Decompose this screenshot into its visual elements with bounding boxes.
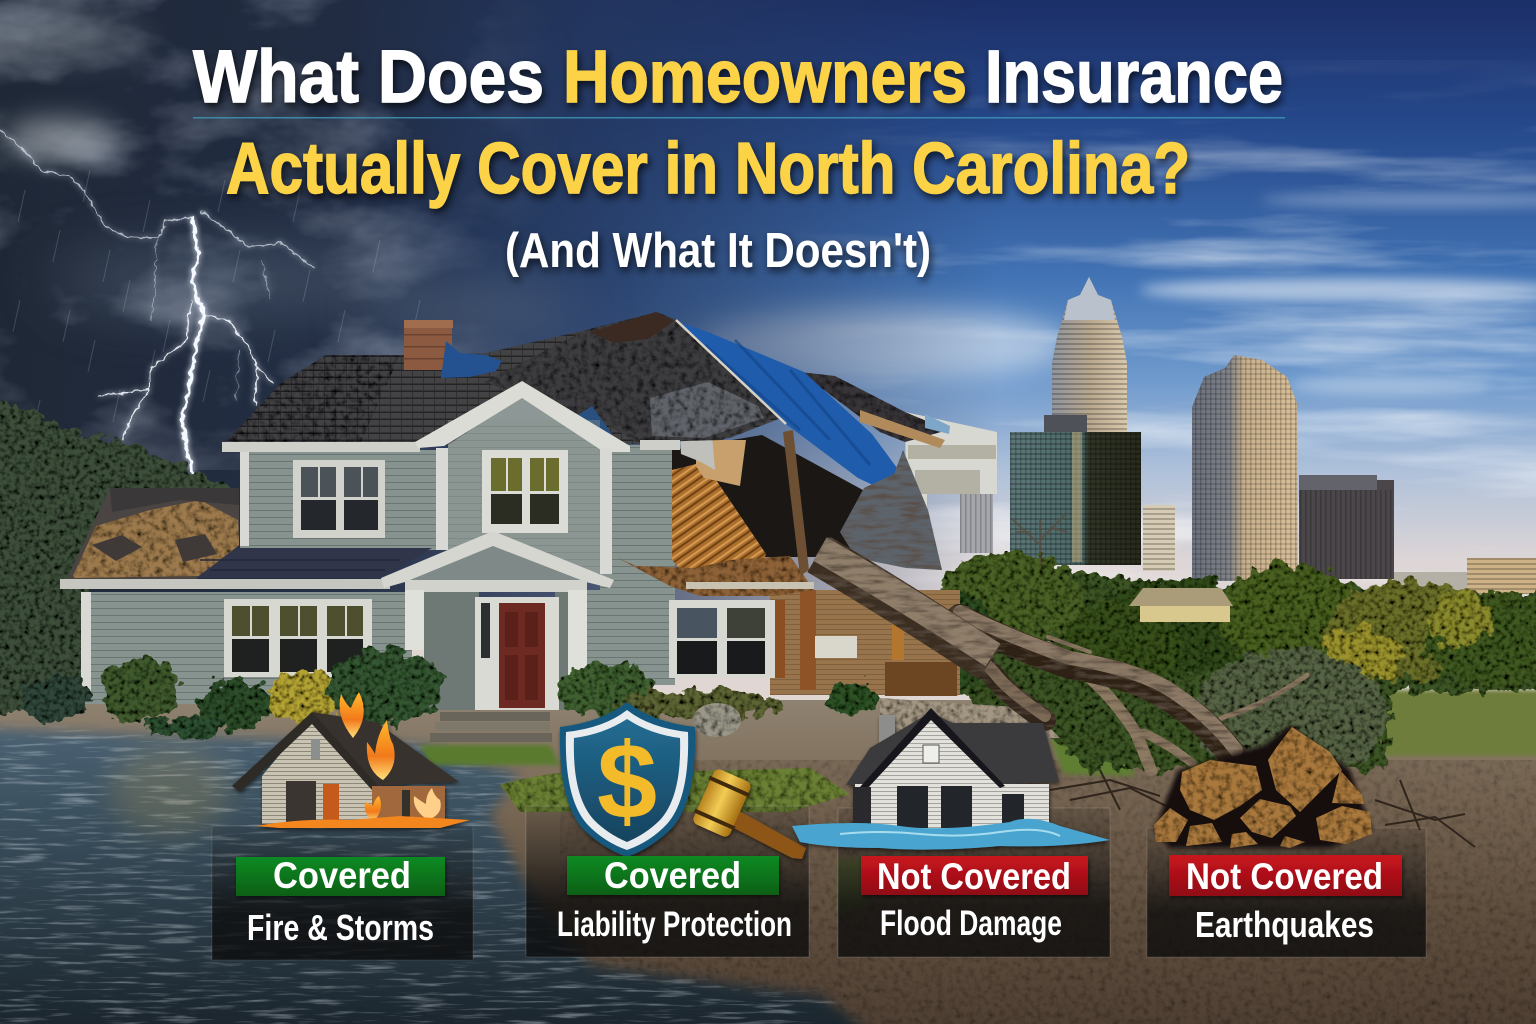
background: stormy sky to clear sky <box>0 0 1536 700</box>
flame strip on water <box>256 816 470 828</box>
house: right rear wing <box>800 372 997 554</box>
badge: not covered: Not Covered <box>877 856 1071 897</box>
flood water <box>792 819 1110 850</box>
tree: lower limb <box>960 647 1045 720</box>
dark trees on left <box>0 402 240 725</box>
house: damaged main roof <box>222 312 781 452</box>
striped tower <box>1192 355 1298 581</box>
icon: burning house <box>232 692 470 828</box>
damaged two-storey house <box>60 312 997 742</box>
torn metal sheet <box>840 450 942 570</box>
background trees on right <box>922 552 1536 780</box>
yellow neighbour house <box>1129 588 1233 622</box>
title line one <box>193 35 1283 118</box>
panel: earthquakes <box>1147 725 1426 957</box>
porch gable <box>381 531 614 680</box>
house: storm hole <box>672 435 872 557</box>
garden rock <box>693 703 741 737</box>
storm debris twigs <box>1050 770 1475 847</box>
garden shrubs <box>20 650 876 737</box>
rain streaks <box>13 170 420 432</box>
label: liability protection: Liability Protection <box>557 905 792 944</box>
ground: dirt and water <box>0 690 1536 1024</box>
panel: flood damage <box>792 708 1110 957</box>
dark tower <box>1299 475 1394 579</box>
small blue tarp near chimney <box>441 341 502 378</box>
badge: not covered: Not Covered <box>1186 856 1383 897</box>
house: central gable <box>415 381 630 574</box>
gravel path <box>880 698 1060 742</box>
title line one: Homeowners <box>563 35 967 118</box>
panel: liability protection <box>526 702 809 957</box>
title <box>193 35 1283 278</box>
tree: thin branches <box>1048 637 1307 770</box>
front steps <box>430 712 552 742</box>
house: lower right room <box>770 590 960 696</box>
window: upper left <box>293 460 385 538</box>
tree: main limb <box>960 618 1232 755</box>
label: flood damage: Flood Damage <box>880 904 1062 943</box>
house: upper left wall <box>240 450 440 550</box>
collapsed porch debris <box>618 556 814 596</box>
icon: cracked rocks <box>1154 725 1372 848</box>
badge: covered: Covered <box>273 855 411 896</box>
house: right walls <box>424 445 675 710</box>
badge: covered: Covered <box>604 855 741 896</box>
icon: flooded house <box>792 708 1110 850</box>
tree: trunk <box>818 554 990 662</box>
icon: shield with dollar sign <box>560 702 695 857</box>
window: lower left triple <box>224 599 372 677</box>
flames on roof <box>340 692 441 822</box>
window: gable <box>482 450 568 533</box>
title line one: What Does <box>193 35 544 118</box>
house: lower left wall <box>81 592 412 704</box>
title line two: Actually Cover in North Carolina? <box>226 129 1190 209</box>
label: fire and storms: Fire & Storms <box>247 907 434 948</box>
window: lower right <box>669 600 775 678</box>
panel: fire and storms <box>212 692 473 960</box>
subtitle: (And What It Doesn't) <box>505 224 931 278</box>
label: earthquakes: Earthquakes <box>1195 904 1374 945</box>
skyline buildings <box>960 277 1536 594</box>
fallen tree <box>818 549 1307 770</box>
house: lower left damaged roof <box>60 488 432 589</box>
icon: shield with dollar sign: $ <box>597 720 657 841</box>
lightning bolt <box>0 130 314 480</box>
crown tower <box>1010 277 1141 565</box>
badge: covered <box>567 855 779 896</box>
icon: gavel <box>690 767 806 859</box>
house: exposed wood boards <box>672 430 809 580</box>
house: chimney <box>404 320 453 370</box>
title line one: Insurance <box>985 35 1283 118</box>
front door <box>475 597 559 710</box>
bare tree <box>1012 514 1068 565</box>
large blue tarp <box>676 320 900 496</box>
